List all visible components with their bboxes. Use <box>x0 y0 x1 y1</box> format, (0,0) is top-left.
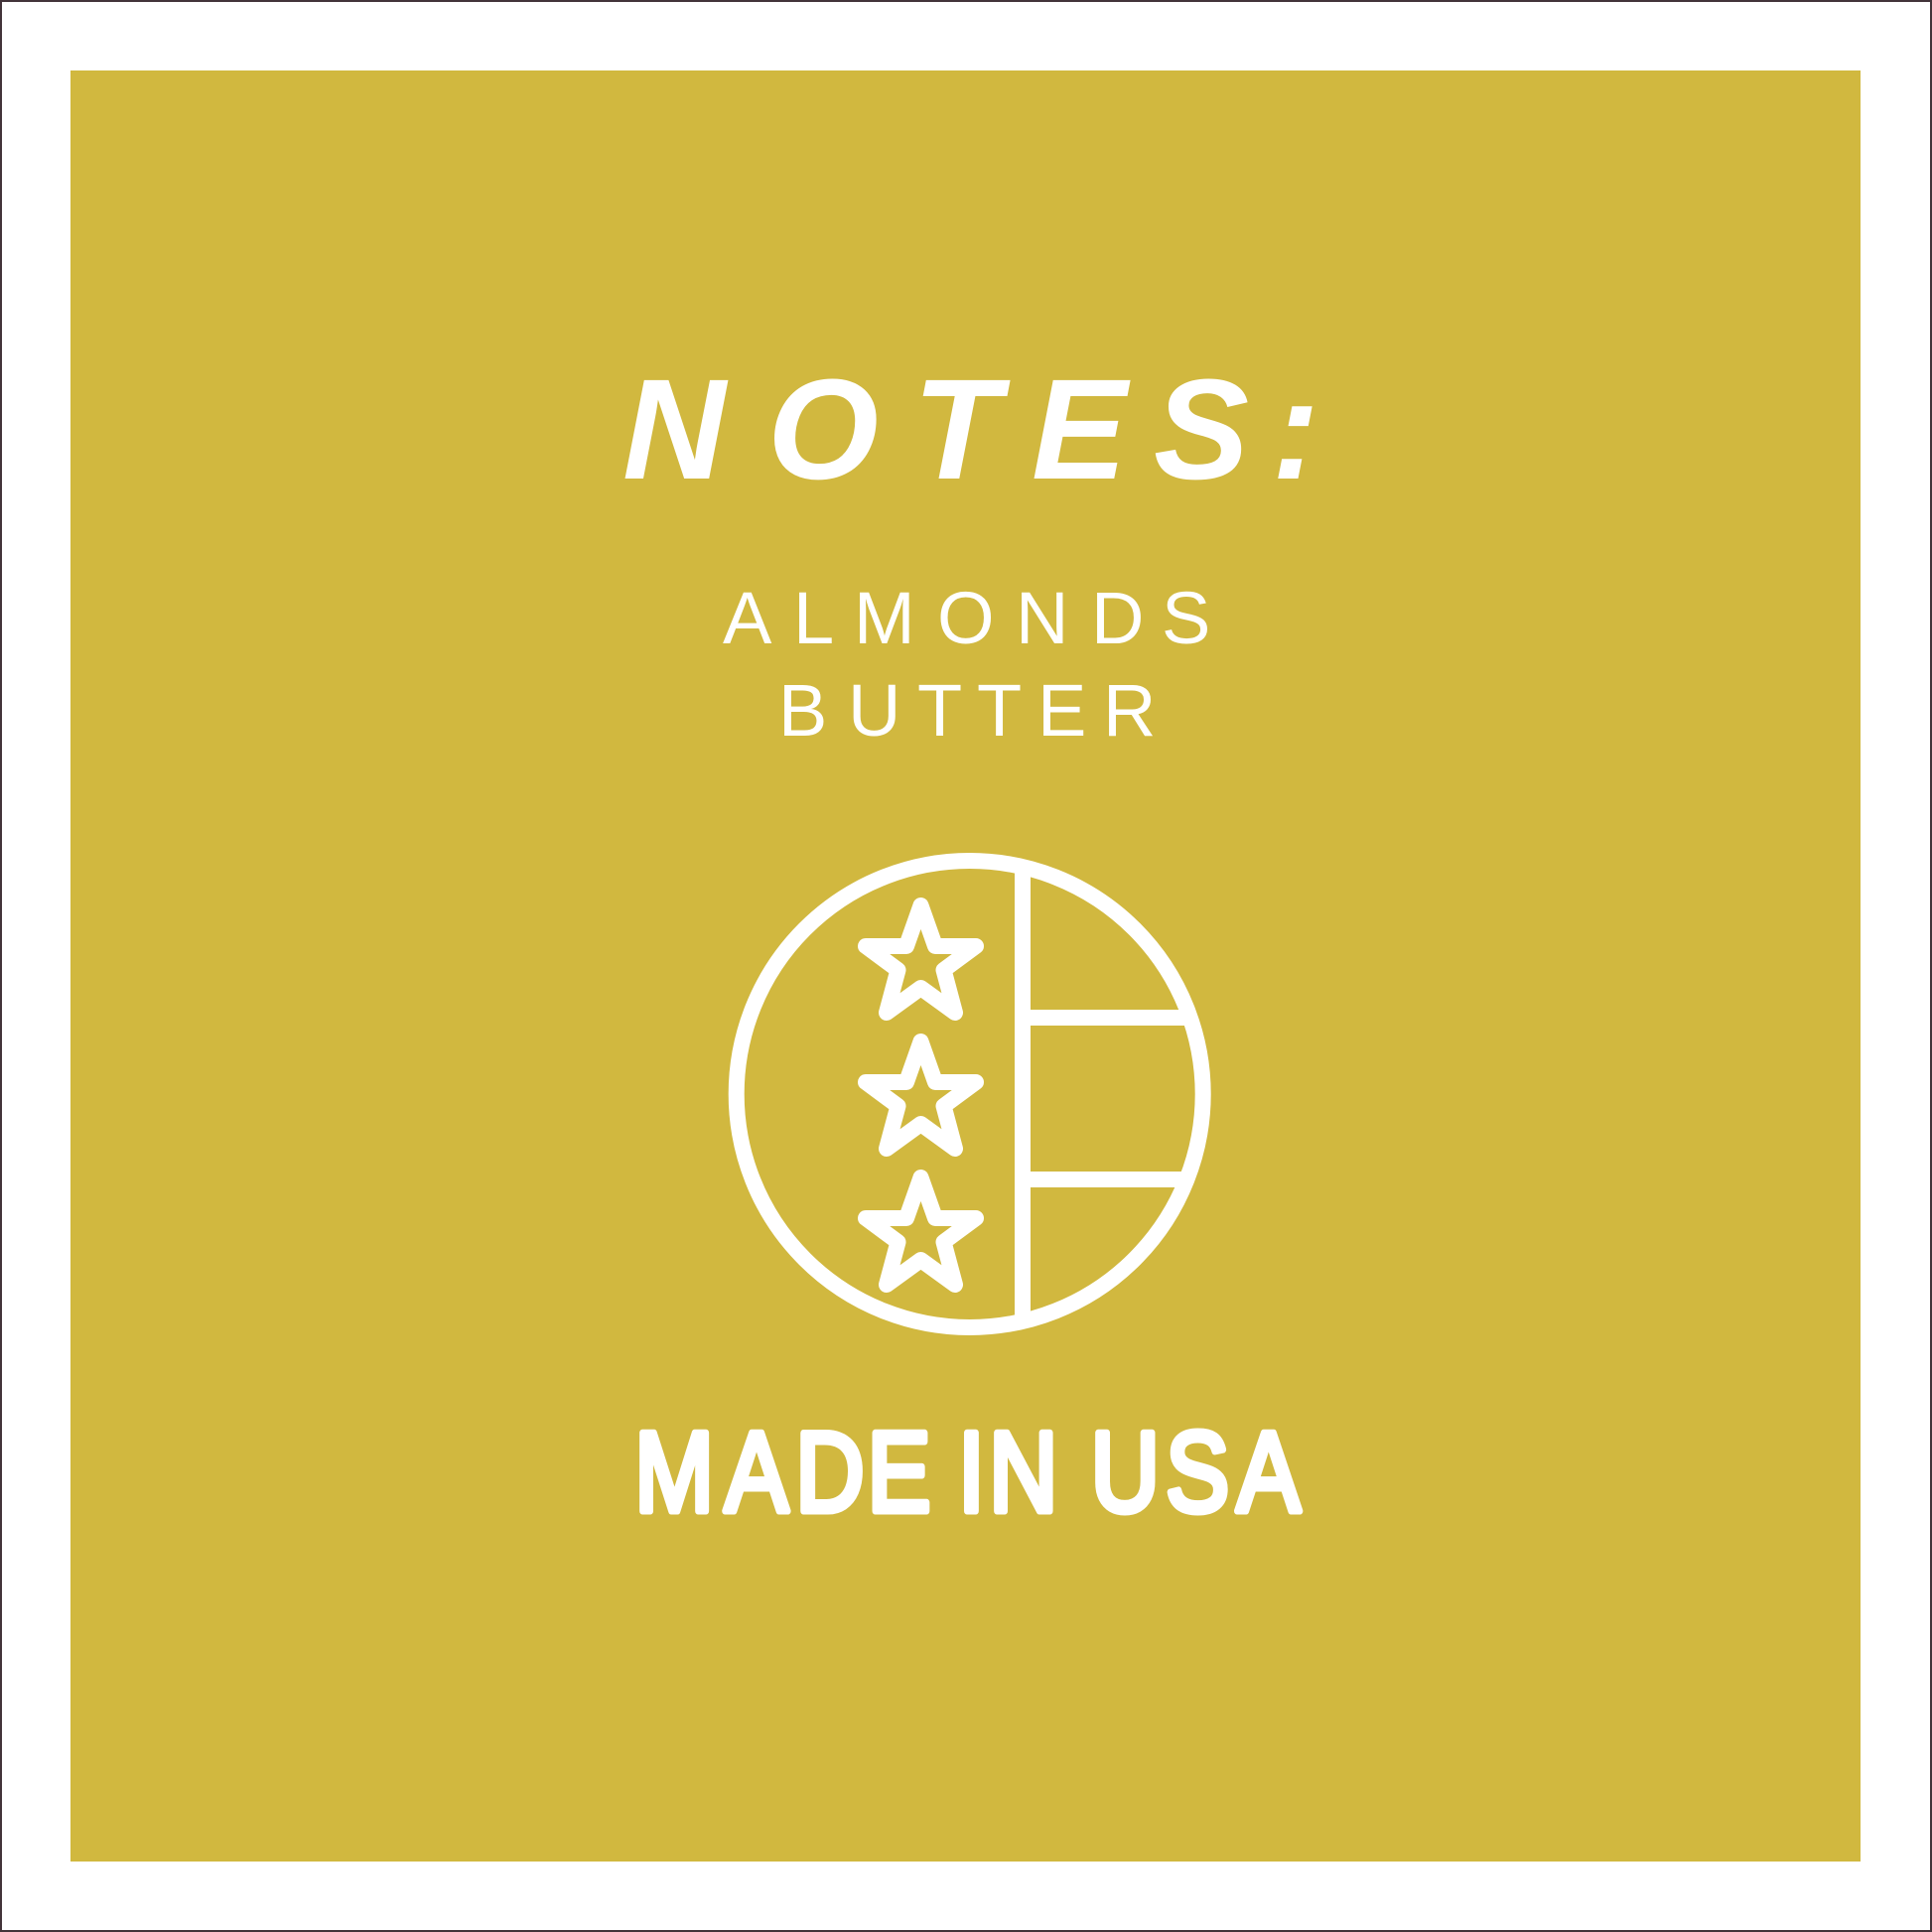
title: NOTES: NOTES: <box>622 349 1319 509</box>
icon: three stars <box>866 905 976 1285</box>
footer: MADE IN USA: MADE IN USA <box>634 1410 1301 1536</box>
icon dividers <box>1015 874 1184 1314</box>
flavour text: BUTTER: BUTTER <box>778 669 1156 752</box>
star 2 <box>866 1041 976 1149</box>
star 1 <box>866 905 976 1013</box>
icon: circle with three stars and divided panels <box>737 854 1211 1334</box>
icon ring <box>737 861 1203 1327</box>
star 3 <box>866 1177 976 1285</box>
flavour text: ALMONDS: ALMONDS <box>723 577 1210 659</box>
